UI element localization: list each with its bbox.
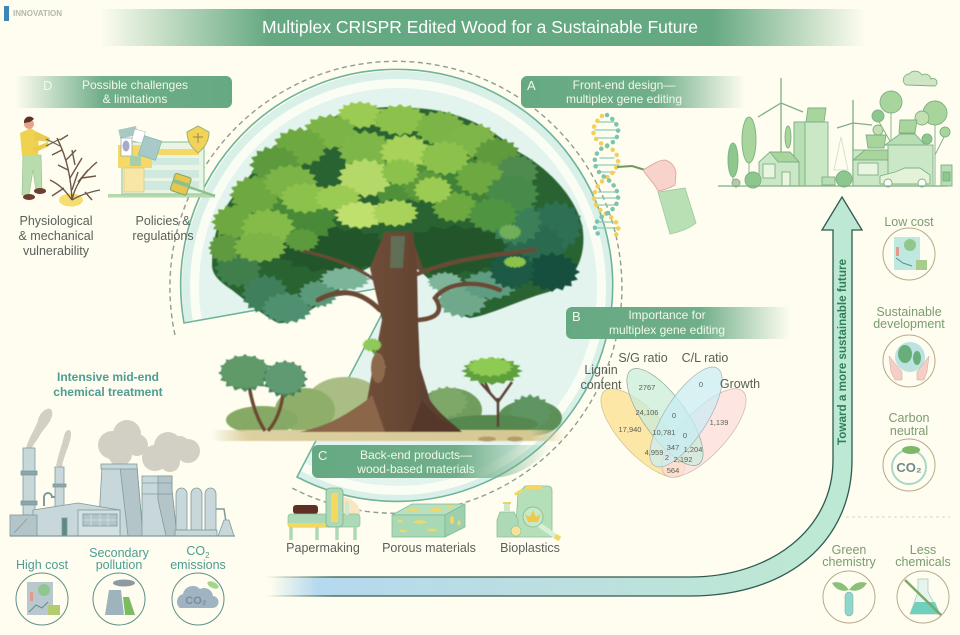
icon: policies	[108, 126, 215, 198]
icon: factory	[10, 409, 235, 536]
canopy leaf clusters	[208, 101, 540, 268]
ground line	[718, 185, 948, 187]
heading C: Back-end products—	[360, 448, 472, 462]
benefit: sustainable development: development	[873, 317, 945, 331]
chart: venn diagram: 24,106	[636, 408, 658, 417]
chart: venn diagram: 0	[699, 380, 703, 389]
logo: INNOVATION: INNOVATION	[13, 9, 62, 18]
canopy base	[212, 107, 583, 323]
heading: Intensive mid-end	[57, 370, 159, 384]
high cost item	[16, 558, 69, 625]
benefit: low cost	[883, 215, 935, 280]
panel A: front-end design	[521, 76, 745, 238]
heading A: multiplex gene editing	[566, 92, 682, 106]
chart: venn diagram: 2	[665, 453, 669, 462]
benefit: green chemistry	[822, 543, 876, 623]
heading A	[521, 76, 745, 108]
icon: porous materials	[392, 504, 465, 537]
heading A: Front-end design—	[573, 78, 675, 92]
secondary pollution item	[89, 546, 150, 625]
buildings	[759, 108, 933, 186]
benefit: less chemicals: Less	[910, 543, 936, 557]
benefit: carbon neutral: CO₂	[896, 460, 922, 475]
chart: venn diagram: 10,781	[653, 428, 675, 437]
heading D	[15, 76, 232, 108]
tree illustration	[208, 101, 583, 442]
high cost item: High cost	[16, 558, 69, 572]
bushes, bench and car	[732, 165, 952, 188]
heading B: Importance for	[628, 308, 706, 322]
canopy underside clusters	[214, 198, 583, 324]
benefit: sustainable development	[873, 305, 945, 387]
benefit: carbon neutral: Carbon	[888, 411, 930, 425]
benefit: low cost: Low cost	[884, 215, 934, 229]
label: bioplastics: Bioplastics	[500, 541, 560, 555]
text: physiological and mechanical vulnerability: Physiological	[20, 214, 92, 228]
chart: venn diagram: 347	[667, 443, 679, 452]
divider	[846, 516, 950, 518]
heading C: wood-based materials	[356, 462, 475, 476]
heading D: Possible challenges	[82, 78, 188, 92]
text: policies and regulations: regulations	[132, 229, 194, 243]
label: papermaking: Papermaking	[286, 541, 360, 555]
panel D: challenges	[15, 76, 232, 258]
benefit: less chemicals: chemicals	[895, 555, 951, 569]
benefit: less chemicals	[895, 543, 951, 623]
icon: DNA helix	[593, 115, 620, 238]
text: physiological and mechanical vulnerability: & mechanical	[18, 229, 94, 243]
wind turbines	[758, 78, 872, 186]
title banner	[100, 9, 865, 46]
dashed outer circle	[170, 61, 622, 513]
icon: papermaking	[288, 488, 360, 540]
heading C	[312, 445, 552, 478]
secondary pollution item: Secondary	[89, 546, 150, 560]
CO2 emissions item: CO₂	[185, 595, 207, 607]
CO2 emissions item: CO	[186, 544, 205, 558]
chart: venn diagram: 564	[667, 466, 679, 475]
text: policies and regulations: Policies &	[136, 214, 191, 228]
chart: venn diagram: 2,192	[674, 455, 692, 464]
venn labels: Growth	[720, 377, 760, 391]
chart: venn diagram: 0	[672, 411, 676, 420]
benefit: sustainable development: Sustainable	[876, 305, 942, 319]
branches	[300, 240, 535, 320]
panel: intensive mid-end chemical treatment	[10, 370, 235, 625]
chart: venn diagram: 1,204	[684, 445, 702, 454]
venn labels	[580, 351, 760, 392]
small trees	[218, 354, 523, 431]
icon: gardener with bare plant	[20, 117, 100, 206]
venn labels: Lignin	[584, 363, 618, 377]
icon: hand holding tool	[617, 160, 696, 234]
chart: venn diagram: 1,139	[710, 418, 728, 427]
heading D: & limitations	[103, 92, 167, 106]
background shrubs	[226, 377, 562, 436]
panel B: importance	[566, 307, 790, 490]
label: porous materials: Porous materials	[382, 541, 476, 555]
chart: venn diagram: 17,940	[619, 425, 641, 434]
CO2 emissions item: emissions	[170, 558, 226, 572]
benefit: carbon neutral: neutral	[890, 424, 928, 438]
benefit: green chemistry: chemistry	[822, 555, 876, 569]
trunk moss	[362, 236, 405, 383]
green city illustration	[718, 71, 952, 188]
logo: INNOVATION	[4, 6, 62, 21]
benefit: carbon neutral	[883, 411, 935, 491]
heading B	[566, 307, 790, 339]
title banner: Multiplex CRISPR Edited Wood for a Sustainable Future	[262, 17, 698, 37]
heading B: multiplex gene editing	[609, 323, 725, 337]
ground	[212, 430, 566, 441]
chart: venn diagram: 4,959	[645, 448, 663, 457]
venn labels: S/G ratio	[618, 351, 668, 365]
roots and stones	[300, 395, 523, 442]
icon: bioplastics	[497, 485, 560, 539]
heading A: A	[527, 78, 536, 93]
text: physiological and mechanical vulnerability: vulnerability	[23, 244, 90, 258]
chart: venn diagram	[588, 357, 759, 490]
heading: chemical treatment	[53, 385, 163, 399]
heading C: C	[318, 448, 327, 463]
heading B: B	[572, 309, 581, 324]
secondary pollution item: pollution	[96, 558, 142, 572]
central circle background with wedge	[181, 69, 614, 503]
heading D: D	[43, 78, 52, 93]
panel C: back-end products	[286, 445, 560, 555]
cloud	[903, 71, 937, 86]
CO2 emissions item	[170, 544, 226, 625]
chart: venn diagram: 0	[683, 431, 687, 440]
venn labels: content	[580, 378, 622, 392]
big arrow toward sustainable future: Toward a more sustainable future	[835, 259, 849, 445]
trees	[728, 91, 950, 186]
chart: venn diagram: 2767	[639, 383, 655, 392]
venn labels: C/L ratio	[682, 351, 728, 365]
benefit: green chemistry: Green	[832, 543, 866, 557]
CO2 emissions item: 2	[205, 551, 210, 560]
trunk	[300, 232, 462, 432]
